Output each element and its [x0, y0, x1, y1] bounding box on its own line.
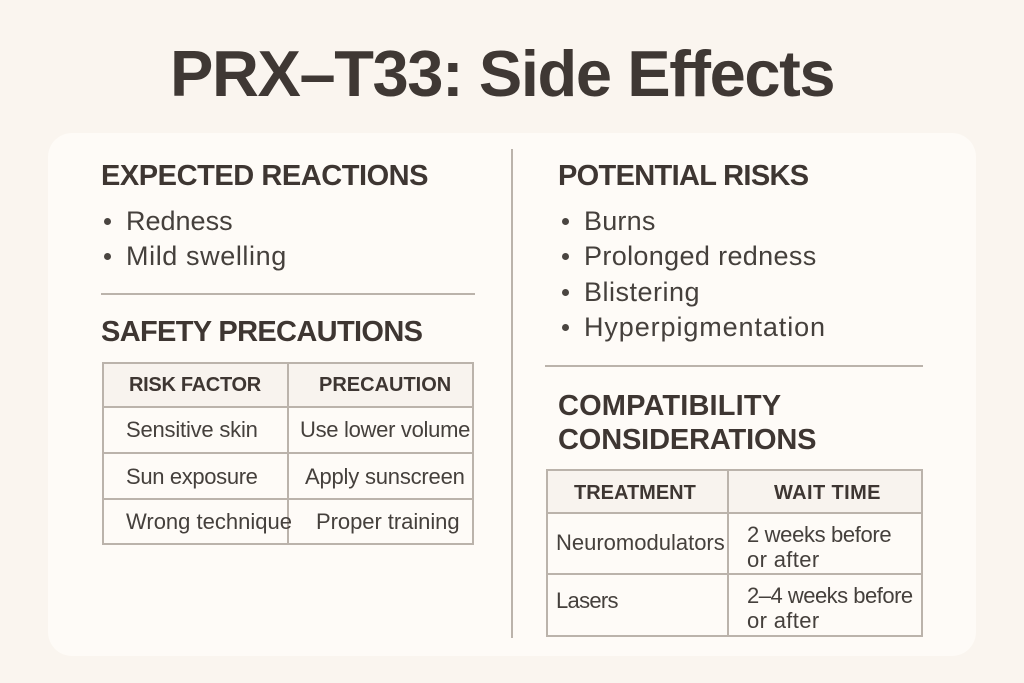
list: expected reactions [104, 206, 287, 271]
table: compatibility: WAIT TIME [774, 482, 881, 504]
heading: compatibility considerations: CONSIDERATIONS [558, 424, 816, 456]
list: expected reactions: Mild swelling [126, 241, 287, 271]
table: safety precautions: PRECAUTION [319, 374, 451, 396]
list: potential risks: Burns [584, 206, 656, 236]
title: PRX–T33: Side Effects [170, 37, 834, 110]
heading: compatibility considerations: COMPATIBILITY [558, 390, 781, 422]
table: safety precautions: Sensitive skin [126, 417, 258, 442]
table: safety precautions: Use lower volume [300, 417, 470, 442]
table: compatibility: 2 weeks before [747, 522, 891, 547]
heading: potential risks: POTENTIAL RISKS [558, 160, 808, 192]
table: compatibility: or after [747, 547, 820, 572]
list: potential risks: Prolonged redness [584, 241, 817, 271]
table: safety precautions: RISK FACTOR [129, 374, 261, 396]
table: compatibility: Neuromodulators [556, 530, 725, 555]
table: safety precautions: Proper training [316, 509, 460, 534]
list: potential risks: Hyperpigmentation [584, 312, 826, 342]
list: potential risks [562, 206, 826, 342]
list: expected reactions: Redness [126, 206, 233, 236]
table: safety precautions: Apply sunscreen [305, 464, 465, 489]
table: safety precautions [102, 362, 474, 545]
heading: expected reactions: EXPECTED REACTIONS [101, 160, 428, 192]
heading: compatibility considerations [558, 390, 816, 456]
table: compatibility: Lasers [556, 588, 618, 613]
table: compatibility: or after [747, 608, 820, 633]
table: safety precautions: Wrong technique [126, 509, 292, 534]
list: potential risks: Blistering [584, 277, 700, 307]
panel: main card [48, 133, 976, 656]
table: compatibility [546, 469, 923, 637]
table: safety precautions: Sun exposure [126, 464, 258, 489]
table: compatibility: TREATMENT [574, 482, 696, 504]
table: compatibility: 2–4 weeks before [747, 583, 913, 608]
heading: safety precautions: SAFETY PRECAUTIONS [101, 316, 422, 348]
